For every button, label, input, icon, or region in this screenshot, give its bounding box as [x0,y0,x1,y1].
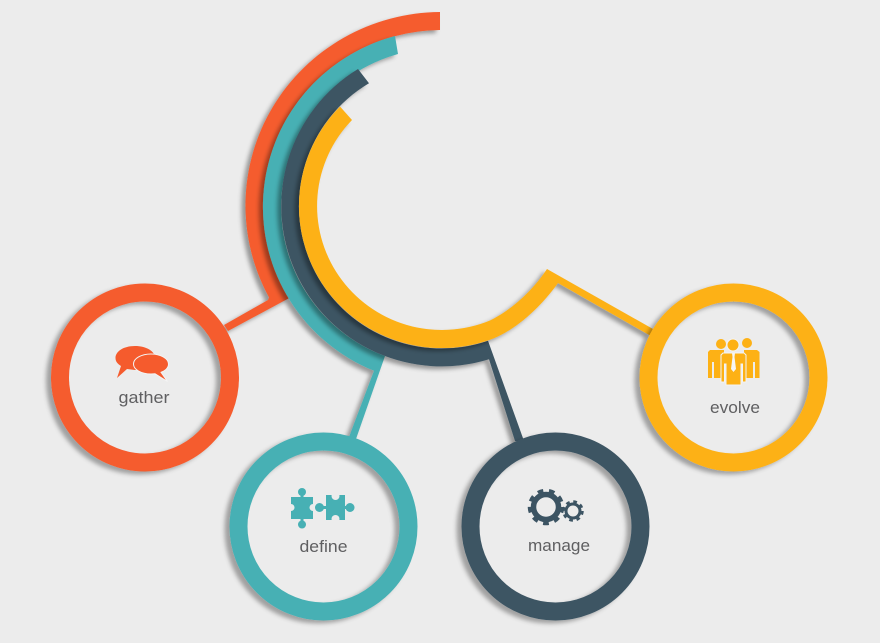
label: manage: manage [528,536,590,555]
label: define: define [300,537,348,556]
icon: team of people [708,338,760,385]
icon: speech bubbles [116,346,168,382]
arc: gather orange with connector [224,12,440,331]
arc: manage navy with connector [281,69,524,441]
panel: manage [470,442,640,612]
label: gather: gather [118,388,170,407]
icon: gears [530,490,582,524]
ring: define [238,442,408,612]
panel: evolve [648,292,818,462]
label: evolve: evolve [710,398,760,417]
panel: gather [60,292,230,462]
ring: evolve [648,292,818,462]
ring: manage [470,442,640,612]
ring: gather [60,292,230,462]
icon: puzzle pieces [288,488,354,528]
panel: define [238,442,408,612]
arc: define teal with connector [263,36,398,439]
arc: evolve yellow with connector [299,106,653,348]
